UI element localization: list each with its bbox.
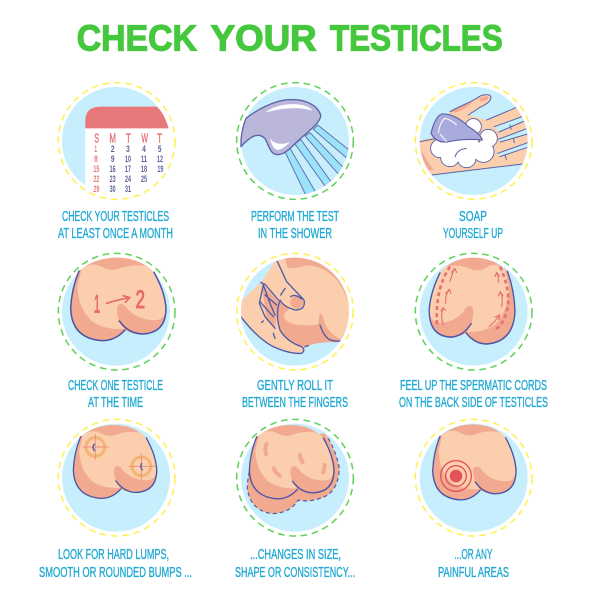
calendar dates: 24 xyxy=(125,174,131,184)
label: roll: GENTLY ROLL IT xyxy=(257,378,333,394)
calendar dates: 16 xyxy=(110,164,116,174)
label: shower: PERFORM THE TEST xyxy=(251,209,339,225)
calendar dates: 4 xyxy=(142,144,146,154)
panel: calendar xyxy=(58,83,180,203)
hand xyxy=(415,95,530,175)
calendar dates: 11 xyxy=(141,154,147,164)
calendar dates: T xyxy=(126,131,131,145)
label: one testicle line 2: AT THE TIME xyxy=(88,395,143,411)
label: painful line 2: PAINFUL AREAS xyxy=(438,565,509,581)
calendar dates: T xyxy=(157,131,162,145)
panel: soapy hand xyxy=(415,83,532,199)
label: calendar: CHECK YOUR TESTICLES xyxy=(62,209,169,225)
calendar dates: 1 xyxy=(94,144,97,154)
panel: changes in size xyxy=(237,419,353,536)
calendar dates: 30 xyxy=(110,184,116,194)
panel: roll between fingers xyxy=(237,253,353,370)
label: calendar line 2: AT LEAST ONCE A MONTH xyxy=(58,226,173,242)
numbers and arrow: 2 xyxy=(136,286,145,314)
calendar dates: 15 xyxy=(93,164,99,174)
label: shower line 2: IN THE SHOWER xyxy=(258,226,332,242)
calendar dates: M xyxy=(109,131,116,145)
soap bar xyxy=(431,114,482,142)
title xyxy=(77,18,503,58)
calendar dates: W xyxy=(141,131,148,145)
title: TESTICLES xyxy=(330,18,503,58)
hand and body xyxy=(238,255,353,354)
calendar dates xyxy=(93,131,163,194)
swollen outline xyxy=(247,433,339,514)
label: changes line 2: SHAPE OR CONSISTENCY... xyxy=(235,565,355,581)
lump targets xyxy=(83,434,155,480)
cords and arrows xyxy=(437,267,508,331)
label: lumps: LOOK FOR HARD LUMPS, xyxy=(58,547,169,563)
panel: painful areas xyxy=(415,419,532,536)
label: lumps line 2: SMOOTH OR ROUNDED BUMPS ... xyxy=(39,565,192,581)
label: soap line 2: YOURSELF UP xyxy=(443,226,503,242)
calendar dates: 2 xyxy=(111,144,114,154)
calendar dates: 18 xyxy=(141,164,147,174)
calendar dates: 8 xyxy=(94,154,98,164)
panel: hard lumps xyxy=(58,419,175,536)
label: painful: ...OR ANY xyxy=(454,547,493,563)
calendar dates: 3 xyxy=(126,144,130,154)
calendar dates: 5 xyxy=(158,144,161,154)
water jets xyxy=(285,125,352,198)
calendar dates: 10 xyxy=(125,154,131,164)
calendar dates: 19 xyxy=(157,164,163,174)
title: CHECK xyxy=(77,18,198,58)
blotches xyxy=(265,444,325,476)
label: soap: SOAP xyxy=(459,209,487,225)
calendar dates: 31 xyxy=(125,184,131,194)
label: one testicle: CHECK ONE TESTICLE xyxy=(68,378,163,394)
panel: shower xyxy=(237,83,353,199)
calendar dates: 22 xyxy=(93,174,99,184)
panel: spermatic cords xyxy=(415,253,532,370)
calendar dates: 29 xyxy=(93,184,99,194)
calendar dates: 23 xyxy=(110,174,116,184)
calendar dates: S xyxy=(94,131,99,145)
pain target xyxy=(441,461,471,491)
numbers and arrow: 1 xyxy=(94,291,100,319)
title: YOUR xyxy=(211,18,317,58)
numbers and arrow xyxy=(94,286,145,319)
shower head xyxy=(241,100,321,155)
label: roll line 2: BETWEEN THE FINGERS xyxy=(242,395,348,411)
label: changes: ...CHANGES IN SIZE, xyxy=(250,547,341,563)
panel: one testicle at a time xyxy=(58,253,175,370)
calendar dates: 9 xyxy=(111,154,114,164)
soap foam xyxy=(431,119,497,168)
calendar dates: 17 xyxy=(125,164,131,174)
calendar dates: 12 xyxy=(157,154,163,164)
calendar dates: 25 xyxy=(141,174,147,184)
